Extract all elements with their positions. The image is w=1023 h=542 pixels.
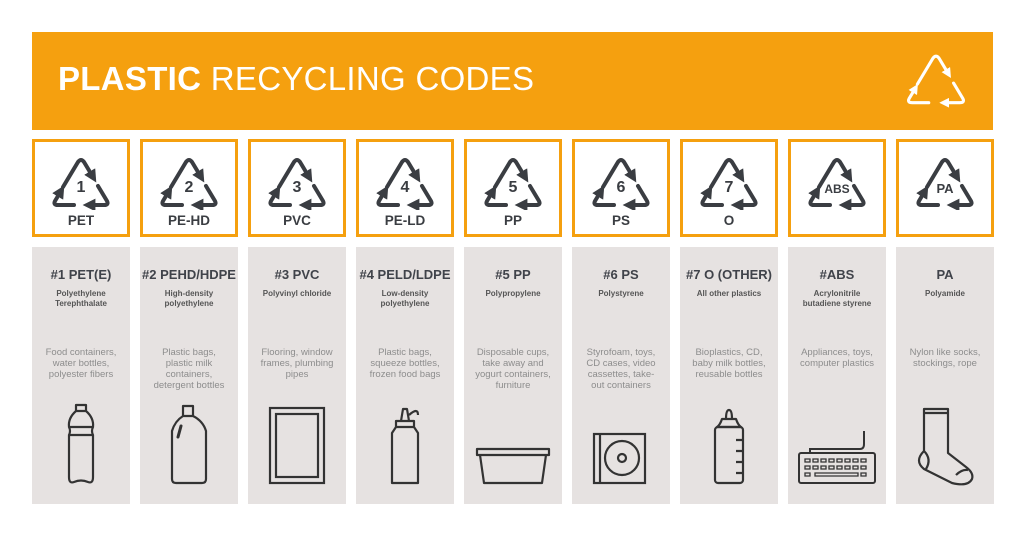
code box 4 PE-LD: 4 — [401, 179, 409, 196]
panel: O: Bioplastics, CD, baby milk bottles, reusable bottles — [692, 347, 766, 380]
panel: PEHD: #2 PEHD/HDPE — [142, 267, 236, 282]
code box 3 PVC: 3 — [293, 179, 301, 196]
icon: keyboard — [798, 431, 876, 484]
panel: PVC: #3 PVC — [275, 267, 319, 282]
panel: ABS: Acrylonitrile — [814, 289, 860, 298]
code box 7 O: O — [724, 213, 734, 228]
panel: PA: Nylon like socks, stockings, rope — [910, 347, 980, 369]
panel: PELD: polyethylene — [381, 299, 429, 308]
panel: PEHD — [140, 247, 238, 504]
icon: recycling triangle — [907, 54, 965, 108]
icon: water bottle — [68, 404, 94, 484]
icon: squeeze bottle — [390, 408, 420, 484]
code box 5 PP — [464, 139, 562, 237]
panel: PP — [464, 247, 562, 504]
code box 4 PE-LD — [356, 139, 454, 237]
code box 5 PP: PP — [504, 213, 522, 228]
panel: PELD: #4 PELD/LDPE — [359, 267, 451, 282]
panel: PELD: Plastic bags, squeeze bottles, frozen food bags — [370, 347, 440, 380]
code box 7 O — [680, 139, 778, 237]
panel: PEHD: High-density — [165, 289, 213, 298]
panel: ABS: #ABS — [820, 267, 854, 282]
title: PLASTIC RECYCLING CODES — [58, 60, 534, 97]
panel: PVC — [248, 247, 346, 504]
code box 7 O: 7 — [725, 179, 733, 196]
code box 6 PS: PS — [612, 213, 630, 228]
panel: PP: Disposable cups, take away and yogurt containers, furniture — [475, 347, 551, 391]
icon: detergent jug — [170, 404, 208, 484]
panel: PA — [896, 247, 994, 504]
code box 1 PET: PET — [68, 213, 94, 228]
panel: PP: #5 PP — [495, 267, 531, 282]
icon: baby bottle — [714, 408, 744, 484]
panel: PET — [32, 247, 130, 504]
panel: PET: #1 PET(E) — [51, 267, 111, 282]
icon: window frame — [268, 406, 326, 484]
panel: PET: Polyethylene — [56, 289, 106, 298]
panel: ABS: Appliances, toys, computer plastics — [800, 347, 874, 369]
code box 4 PE-LD: PE-LD — [385, 213, 425, 228]
panel: ABS — [788, 247, 886, 504]
header banner — [32, 32, 993, 130]
panel: PP: Polypropylene — [485, 289, 541, 298]
code box PA: PA — [936, 181, 954, 196]
panel: PS: Polystyrene — [598, 289, 644, 298]
panel: O — [680, 247, 778, 504]
icon: food container — [476, 448, 550, 484]
code box 3 PVC — [248, 139, 346, 237]
panel: PA: Polyamide — [925, 289, 965, 298]
code box 1 PET — [32, 139, 130, 237]
panel: PS — [572, 247, 670, 504]
code box ABS — [788, 139, 886, 237]
code box 2 PE-HD — [140, 139, 238, 237]
icon: CD case — [592, 432, 646, 484]
panel: PS: Styrofoam, toys, CD cases, video cassettes, take-out containers — [586, 347, 656, 391]
code box 6 PS — [572, 139, 670, 237]
panel: PA: PA — [936, 267, 954, 282]
code box ABS: ABS — [824, 182, 850, 196]
panel: PELD: Low-density — [382, 289, 428, 298]
panel: ABS: butadiene styrene — [803, 299, 871, 308]
code box 6 PS: 6 — [617, 179, 625, 196]
panel: PELD — [356, 247, 454, 504]
code box 2 PE-HD: 2 — [185, 179, 193, 196]
code box 2 PE-HD: PE-HD — [168, 213, 210, 228]
code box PA — [896, 139, 994, 237]
panel: PS: #6 PS — [603, 267, 639, 282]
panel: O: #7 O (OTHER) — [686, 267, 772, 282]
panel: PET: Food containers, water bottles, polyester fibers — [46, 347, 116, 380]
icon: sock — [918, 408, 974, 486]
panel: PEHD: polyethylene — [165, 299, 213, 308]
panel: PVC: Polyvinyl chloride — [263, 289, 331, 298]
panel: PVC: Flooring, window frames, plumbing pipes — [261, 347, 333, 380]
panel: O: All other plastics — [697, 289, 761, 298]
panel: PEHD: Plastic bags, plastic milk containers, detergent bottles — [154, 347, 224, 391]
code box 3 PVC: PVC — [283, 213, 311, 228]
panel: PET: Terephthalate — [55, 299, 107, 308]
code box 1 PET: 1 — [77, 179, 85, 196]
code box 5 PP: 5 — [509, 179, 517, 196]
